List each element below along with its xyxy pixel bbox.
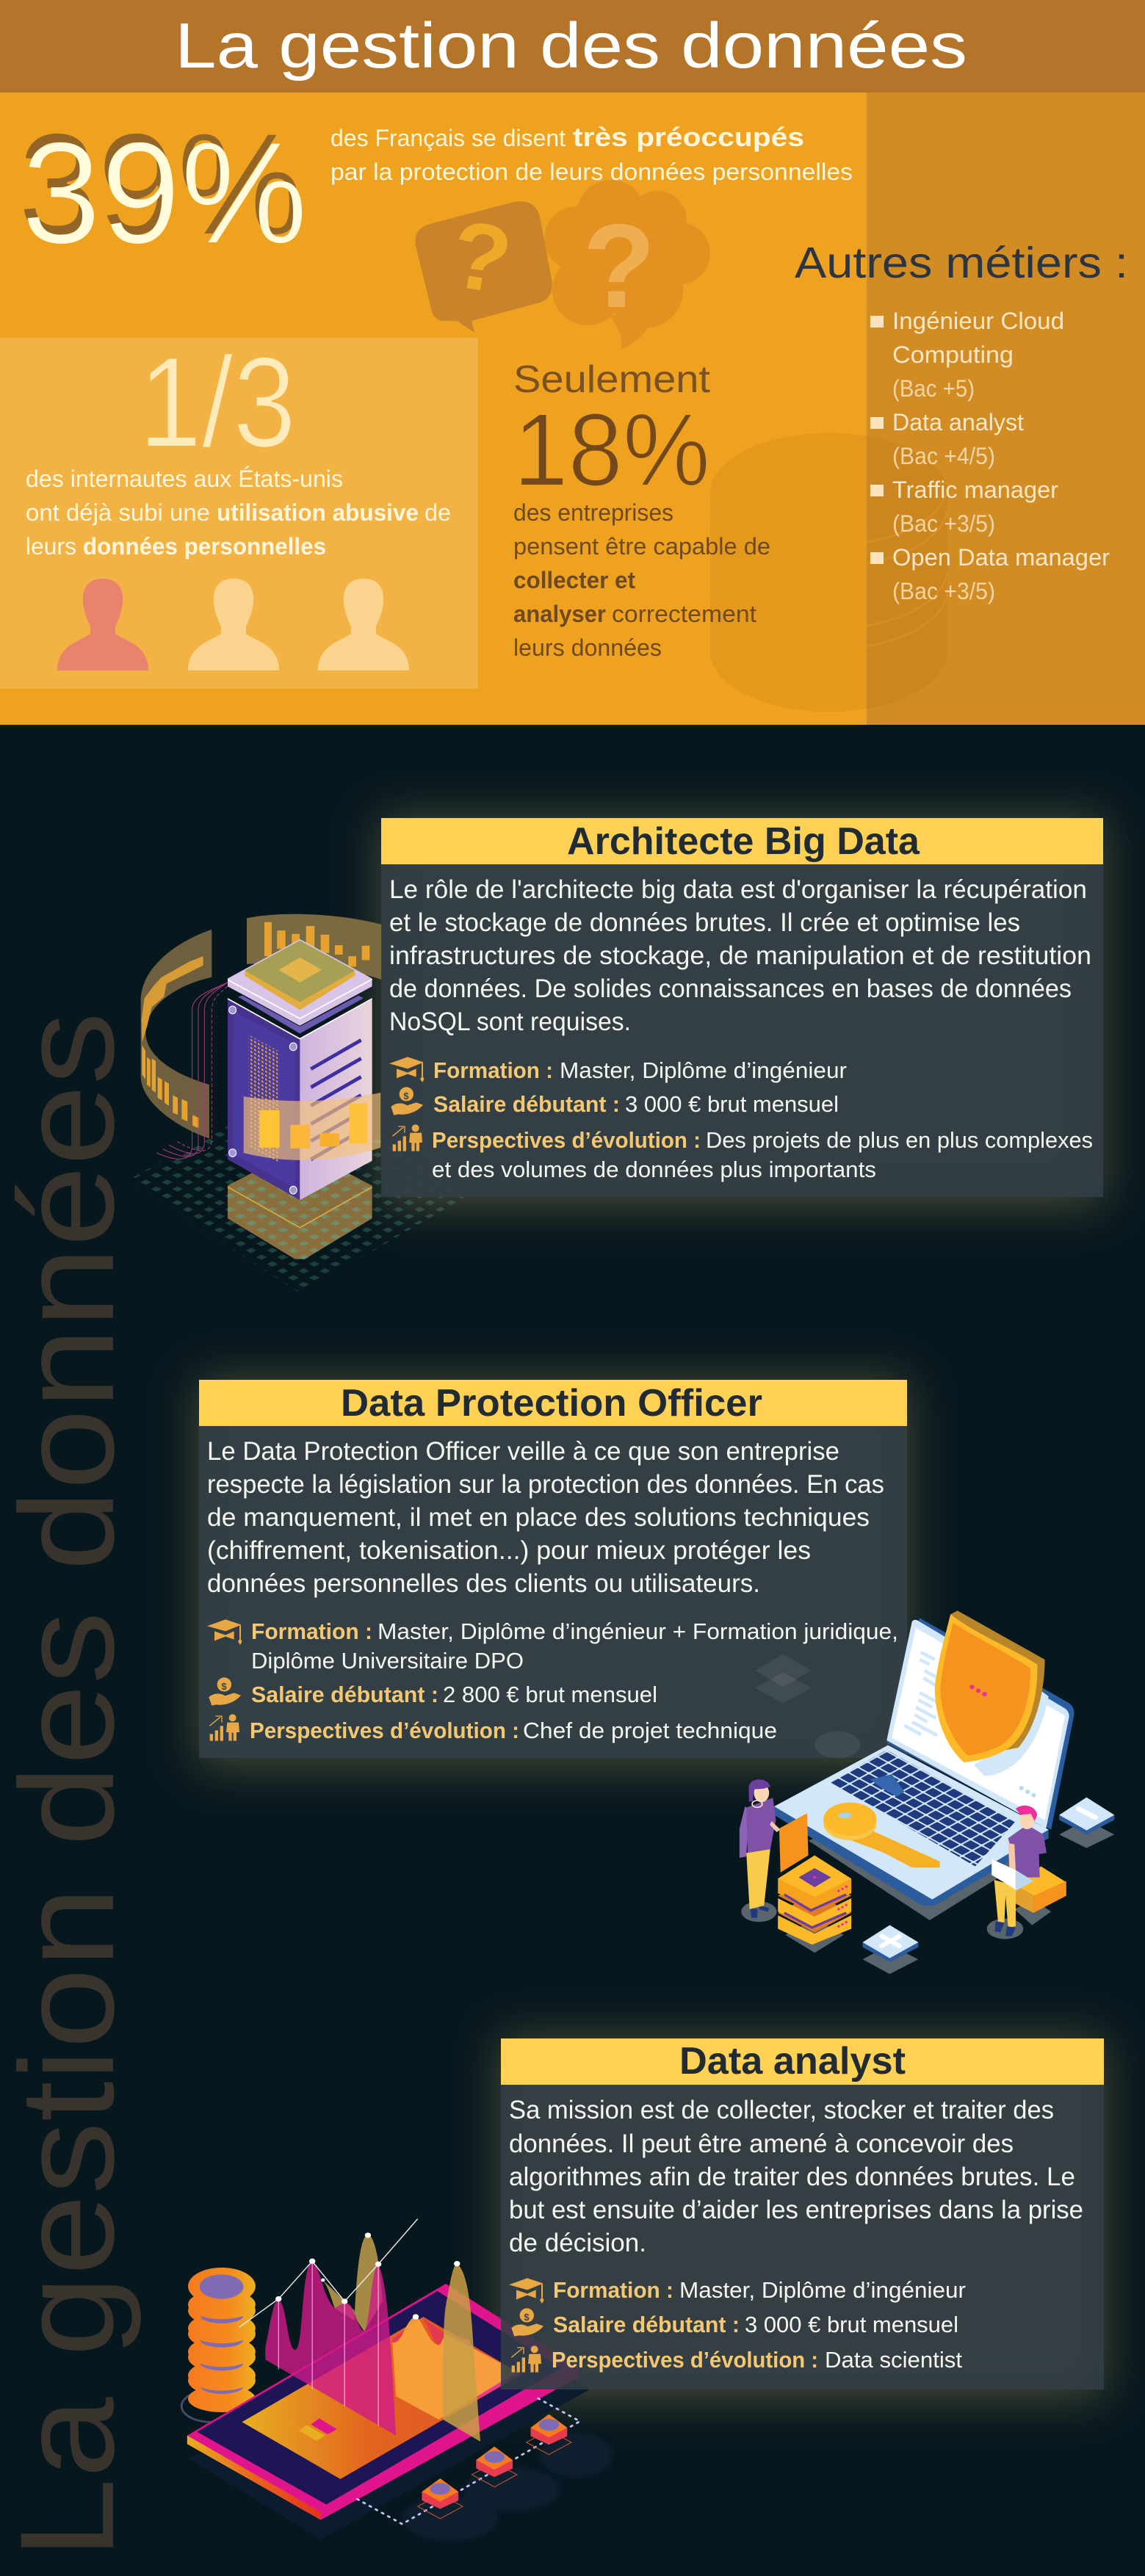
row: perspectives (209, 1714, 777, 1743)
row: perspectives: Data scientist (825, 2347, 962, 2373)
row: salaire: 3 000 € brut mensuel (745, 2312, 958, 2337)
list: autres métiers: (Bac +3/5) (892, 510, 995, 537)
text: 18 percent description: pensent être capable de (513, 533, 770, 560)
illustration: isometric server (127, 914, 468, 1293)
keyboard (830, 1750, 1016, 1867)
tile: minus (1059, 1798, 1114, 1848)
shield shadow (974, 1689, 1049, 1776)
heading (501, 2038, 1104, 2085)
text: 39 percent description: par la protection de leurs données personnelles (331, 159, 853, 185)
row: formation (509, 2277, 966, 2304)
glow behind panel two (199, 1380, 907, 1765)
tan chart back (323, 2235, 383, 2331)
row: formation: Diplôme Universitaire DPO (251, 1648, 524, 1674)
panel: data analyst (501, 2038, 1104, 2389)
text: 39 percent description: très préoccupés (573, 122, 804, 152)
row: salaire: 3 000 € brut mensuel (625, 1091, 839, 1117)
text: 18 percent description: analyser (513, 601, 606, 627)
server left face (228, 999, 300, 1200)
laptop deck (774, 1745, 1049, 1906)
server stripes (311, 1040, 361, 1159)
red accents (392, 2318, 446, 2345)
row: formation: Master, Diplôme d’ingénieur (560, 1057, 847, 1083)
text: 18 percent description: correctement (612, 601, 756, 627)
list: autres métiers: Computing (892, 341, 1014, 368)
description: données personnelles des clients ou utilisateurs. (207, 1569, 760, 1598)
list: autres métiers: (Bac +3/5) (892, 578, 995, 604)
text: one third description: ont déjà subi une (26, 499, 210, 526)
stat: one third: 1/3 (139, 331, 296, 474)
faint shapes on panel (755, 1654, 860, 1758)
description: Sa mission est de collecter, stocker et traiter des (509, 2096, 1054, 2124)
text: 18 percent description: leurs données (513, 634, 662, 661)
text: one third description: leurs (26, 533, 76, 560)
stat: seulement 18 percent: 18% (513, 391, 710, 507)
icon: cloud question bubble: ? (583, 200, 655, 333)
tan chart front (443, 2264, 480, 2442)
coin stack (181, 2268, 256, 2422)
icon: three people (57, 579, 409, 670)
text: 39 percent description (331, 122, 853, 185)
row: salaire (209, 1677, 657, 1707)
server stack (778, 1856, 851, 1953)
row: salaire: 2 800 € brut mensuel (443, 1682, 657, 1707)
heading (381, 818, 1103, 864)
text: 39 percent description: des Français se disent (331, 125, 566, 151)
header band (0, 0, 1145, 93)
server left inner face (234, 1011, 295, 1188)
row: salaire: Salaire débutant : (553, 2312, 740, 2337)
text: 18 percent description: des entreprises (513, 499, 673, 526)
server door (779, 1813, 809, 1873)
icon: square question bubble: ? (443, 199, 519, 315)
row: formation (389, 1057, 847, 1083)
list: autres métiers: (Bac +5) (892, 375, 975, 402)
pink wires (156, 983, 228, 1159)
row: perspectives: et des volumes de données plus importants (432, 1157, 876, 1182)
laptop shadow (809, 1790, 1046, 1920)
description: de données. De solides connaissances en bases de données (389, 974, 1072, 1003)
heading: Architecte Big Data (567, 820, 920, 863)
description: Le Data Protection Officer veille à ce que son entreprise (207, 1437, 839, 1466)
screws (229, 1006, 297, 1194)
data ring (141, 914, 468, 1153)
right person with box (987, 1806, 1066, 1939)
row: salaire: Salaire débutant : (433, 1091, 620, 1117)
dots on screen (1019, 1786, 1036, 1798)
list: autres métiers: Ingénieur Cloud (892, 308, 1064, 334)
magenta chart (265, 2262, 396, 2436)
list: autres métiers: Open Data manager (892, 544, 1110, 571)
description (207, 1437, 884, 1598)
tile: cross (863, 1925, 918, 1974)
text: one third description (26, 466, 451, 560)
description: algorithmes afin de traiter des données brutes. Le (509, 2163, 1075, 2191)
panel: architecte big data (381, 818, 1103, 1197)
row: perspectives (392, 1124, 1093, 1182)
row: formation: Formation : (553, 2277, 673, 2303)
text: 18 percent description (513, 499, 770, 661)
modules (418, 2414, 571, 2519)
description: et le stockage de données brutes. Il crée et optimise les (389, 908, 1020, 937)
heading: Data Protection Officer (341, 1382, 762, 1425)
glow behind panels (381, 818, 1103, 1204)
row: perspectives: Perspectives d’évolution : (250, 1718, 519, 1743)
left person (740, 1779, 781, 1922)
description: données. Il peut être amené à concevoir des (509, 2130, 1014, 2158)
list: autres métiers: (Bac +4/5) (892, 443, 995, 469)
row: perspectives: Chef de projet technique (523, 1718, 777, 1743)
line chart (239, 2219, 460, 2425)
glow behind panel three (501, 2038, 1104, 2397)
orange area chart (392, 2317, 518, 2420)
text: one third description: données personnelles (83, 533, 326, 560)
server vents (248, 1035, 278, 1163)
icon: database cylinder watermark (710, 433, 947, 712)
band bars (259, 1104, 367, 1148)
chart band over server (244, 1093, 380, 1160)
panel: data protection officer (199, 1380, 907, 1758)
description: Le rôle de l'architecte big data est d'organiser la récupération (389, 875, 1087, 904)
icon: cloud question bubble (544, 180, 710, 350)
row: formation: Formation : (251, 1618, 372, 1644)
list: autres métiers: Traffic manager (892, 477, 1058, 503)
heading: Data analyst (679, 2040, 906, 2083)
floor diamonds (127, 1085, 465, 1293)
row: salaire (391, 1087, 839, 1117)
row: formation (207, 1618, 898, 1674)
laptop back (886, 1618, 1074, 1830)
description: de décision. (509, 2229, 646, 2257)
row: perspectives (511, 2345, 962, 2373)
screen marks (299, 2418, 337, 2441)
heading: autres métiers: Autres métiers : (795, 239, 1128, 287)
row: formation: Formation : (433, 1057, 553, 1083)
dotted connection (357, 2396, 580, 2524)
pink area chart (446, 2334, 521, 2399)
description: de manquement, il met en place des solutions techniques (207, 1503, 870, 1532)
row: perspectives: Perspectives d’évolution : (432, 1127, 701, 1153)
shield (935, 1610, 1045, 1762)
text: one third description: utilisation abusive (217, 499, 419, 526)
description: but est ensuite d’aider les entreprises dans la prise (509, 2196, 1083, 2224)
stat: 39 percent: 39% (18, 103, 304, 265)
base outline (228, 1187, 372, 1228)
row: salaire: $ (221, 1681, 227, 1692)
key (823, 1803, 940, 1867)
server lid (228, 939, 372, 1039)
row: formation: Master, Diplôme d’ingénieur (679, 2277, 966, 2303)
top background: orange band (0, 93, 1145, 725)
document lines (904, 1652, 940, 1735)
illustration: data analytics tablet (181, 2219, 613, 2541)
row: salaire: $ (403, 1090, 409, 1101)
stat: seulement 18 percent: Seulement (513, 358, 711, 401)
description (509, 2096, 1083, 2257)
title: La gestion des données (175, 10, 967, 82)
tablet shadow (187, 2359, 590, 2539)
row: formation: Master, Diplôme d’ingénieur + Formation juridique, (378, 1618, 898, 1644)
laptop screen (886, 1620, 1069, 1828)
icon: square question bubble (415, 199, 552, 333)
row: perspectives: Perspectives d’évolution : (552, 2347, 818, 2373)
diamonds over base (228, 1148, 372, 1259)
text: one third description: des internautes aux États-unis (26, 466, 343, 492)
list: autres métiers (870, 308, 1110, 604)
row: salaire: $ (524, 2312, 530, 2323)
description: infrastructures de stockage, de manipulation et de restitution (389, 941, 1091, 970)
description (389, 875, 1091, 1036)
panel: one third of internet users (0, 331, 478, 689)
base plate (228, 1148, 372, 1259)
glow blobs under modules (402, 2433, 613, 2541)
row: perspectives: Des projets de plus en plus complexes (706, 1127, 1093, 1153)
description: NoSQL sont requises. (389, 1007, 631, 1036)
list: autres métiers: Data analyst (892, 409, 1024, 435)
blue accent keys (870, 1774, 904, 1797)
stat: 39 percent: 39% (21, 112, 308, 274)
description: respecte la législation sur la protection des données. En cas (207, 1470, 884, 1499)
tablet screen (242, 2317, 521, 2479)
tablet body (187, 2284, 579, 2520)
row: salaire (511, 2308, 958, 2337)
text: 18 percent description: collecter et (513, 567, 635, 593)
right column background (867, 93, 1145, 725)
heading (199, 1380, 907, 1426)
description: (chiffrement, tokenisation...) pour mieux protéger les (207, 1536, 811, 1565)
server right face (300, 999, 372, 1200)
row: salaire: Salaire débutant : (251, 1682, 438, 1707)
illustration: laptop security (740, 1610, 1114, 1974)
text: one third description: de (425, 499, 451, 526)
